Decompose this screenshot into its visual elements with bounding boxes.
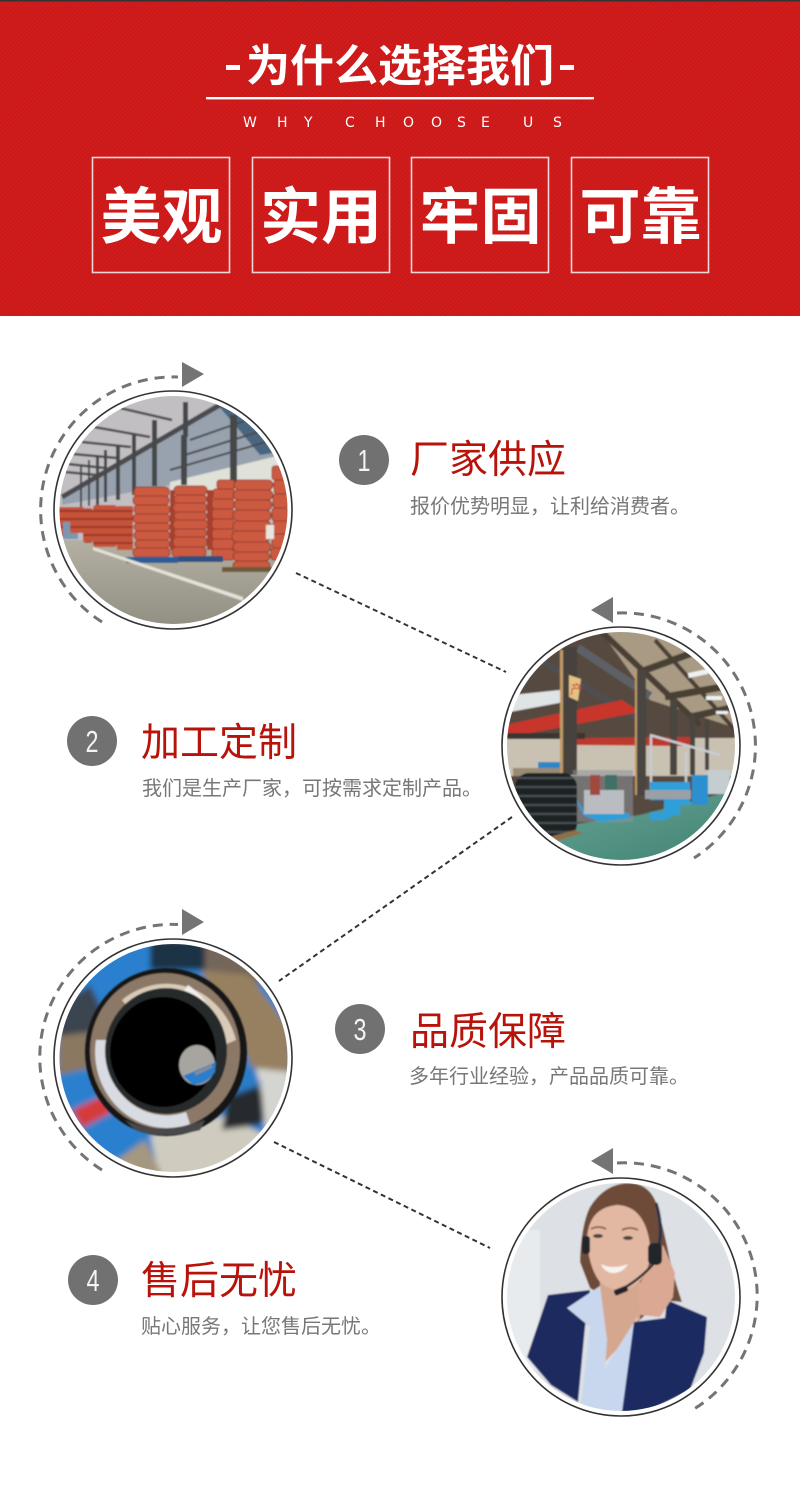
item 3: quality assurance: 3 [354,1012,366,1047]
item 3: quality assurance [335,1004,689,1088]
item 2: custom processing [67,716,482,800]
item 1: factory supply: 1 [358,443,370,478]
panel: circle photo 2 factory: 产 [570,682,583,697]
box: 牢固 [412,158,548,272]
item 4: after-sales service [68,1255,381,1338]
panel: red header [0,0,800,316]
hose stack c [212,480,235,560]
item 1: factory supply: 报价优势明显，让利给消费者。 [410,495,690,518]
subtitle: WHYCHOOSEUS [243,115,562,131]
box: 美观: 美观 [100,183,223,251]
connector line 3 to 4 [274,1142,490,1248]
hose stack a [133,487,170,557]
panel: circle photo 3 hose end [40,909,295,1180]
box: 实用 [252,158,390,272]
connector line 2 to 3 [279,817,512,981]
box: 牢固: 牢固 [419,183,542,251]
item 1: factory supply [339,435,690,518]
box: 可靠: 可靠 [579,183,702,251]
title: 为什么选择我们 [246,42,554,91]
panel: circle photo 4 customer service [502,1148,757,1416]
panel: circle photo 1 warehouse [41,362,295,635]
box: 实用: 实用 [260,183,382,251]
hose stack b [172,486,208,557]
item 4: after-sales service: 贴心服务，让您售后无忧。 [141,1315,381,1338]
item 2: custom processing: 2 [86,724,98,759]
box: 美观 [92,158,230,272]
item 4: after-sales service: 售后无忧 [141,1260,297,1303]
item 1: factory supply: 厂家供应 [410,439,566,482]
item 2: custom processing: 我们是生产厂家，可按需求定制产品。 [142,777,482,800]
item 3: quality assurance: 品质保障 [410,1011,566,1054]
item 2: custom processing: 加工定制 [141,722,297,765]
item 4: after-sales service: 4 [86,1263,100,1298]
hose stack e [271,466,288,560]
item 3: quality assurance: 多年行业经验，产品品质可靠。 [409,1065,689,1088]
connector line 1 to 2 [296,573,506,672]
hose stack d [232,480,273,570]
panel: circle photo 2 factory [502,597,755,870]
box: 可靠 [572,158,708,272]
